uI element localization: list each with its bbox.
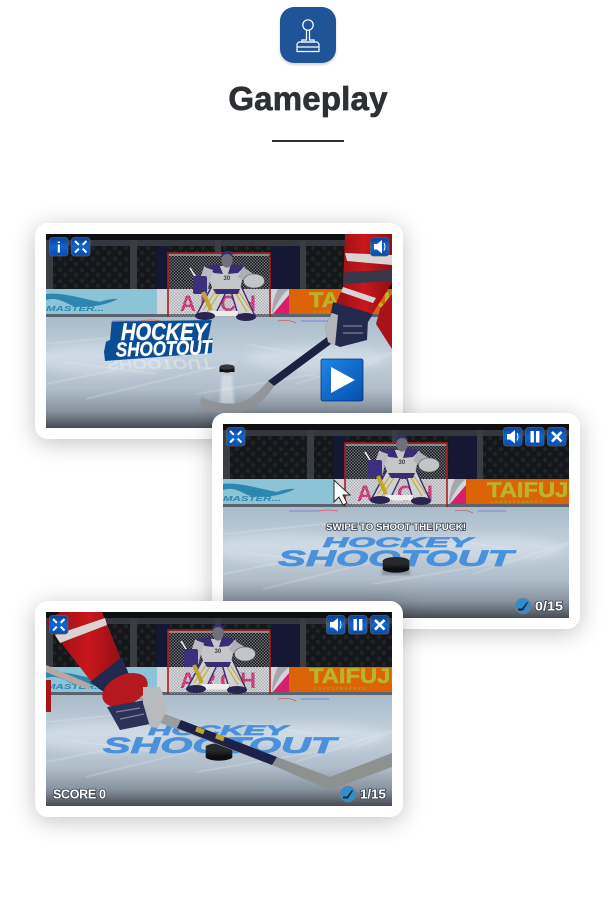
rink logo: SHOOTOUT <box>103 733 339 758</box>
rink logo: HOCKEY <box>323 534 476 550</box>
title: Gameplay <box>228 80 388 117</box>
button: sound <box>504 428 522 446</box>
score: SCORE 0 <box>53 788 106 802</box>
screenshot: shot in play: TAIFUJI <box>309 665 392 688</box>
button: close <box>370 616 389 634</box>
hockey player arm and stick <box>46 612 392 790</box>
screenshot: swipe to shoot: TAIFUJI <box>487 479 569 502</box>
screenshot: start screen: TAIFUJI <box>309 289 392 312</box>
button: info <box>50 238 68 256</box>
logo: Hockey Shootout: SHOOTOUT <box>106 355 214 372</box>
icon: mouse cursor <box>334 480 350 505</box>
puck <box>219 364 235 412</box>
logo: Hockey Shootout: HOCKEY <box>121 319 209 346</box>
shot counter: 0/15 <box>535 600 563 614</box>
screenshot: shot in play: MASTER... <box>46 684 104 691</box>
rink logo: SHOOTOUT <box>278 546 516 571</box>
panel: playing screen card <box>35 601 403 817</box>
rink logo <box>103 722 339 758</box>
play button <box>321 359 363 401</box>
button: pause <box>526 428 544 446</box>
button: pause <box>348 616 367 634</box>
hockey player arm and stick <box>200 234 392 413</box>
screenshot: start screen <box>46 234 392 428</box>
screenshot: swipe to shoot <box>223 424 569 618</box>
logo: Hockey Shootout: SHOOTOUT <box>116 337 214 361</box>
button: close <box>548 428 566 446</box>
button: info: i <box>57 240 61 256</box>
panel: swipe screen card <box>212 413 580 629</box>
screenshot: shot in play: LOUDSPEAKERS <box>314 686 367 690</box>
logo: Hockey Shootout <box>104 319 214 372</box>
screenshot: start screen: ARCH <box>180 291 256 316</box>
rink logo: HOCKEY <box>148 722 291 738</box>
screenshot: shot in play: ARCH <box>180 668 256 693</box>
puck <box>382 557 410 575</box>
screenshot: swipe to shoot: MASTER... <box>223 496 281 503</box>
shot counter: 1/15 <box>360 788 386 802</box>
button: sound <box>370 238 389 256</box>
puck <box>206 743 232 761</box>
button: sound <box>326 616 345 634</box>
button: fullscreen <box>72 238 90 256</box>
button: fullscreen <box>50 616 68 634</box>
screenshot: swipe to shoot: ARCH <box>357 481 433 506</box>
button: fullscreen <box>226 428 245 446</box>
screenshot: swipe to shoot: LOUDSPEAKERS <box>491 499 544 504</box>
panel: start screen card <box>35 223 403 439</box>
shot counter <box>340 786 386 802</box>
screenshot: start screen: LOUDSPEAKERS <box>314 309 367 314</box>
screenshot: shot in play <box>46 612 392 806</box>
shot counter <box>515 598 563 614</box>
screenshot: start screen: MASTER... <box>46 306 104 313</box>
icon: joystick badge <box>279 7 337 66</box>
rink logo <box>278 534 516 571</box>
instruction text: SWIPE TO SHOOT THE PUCK! <box>326 522 466 532</box>
